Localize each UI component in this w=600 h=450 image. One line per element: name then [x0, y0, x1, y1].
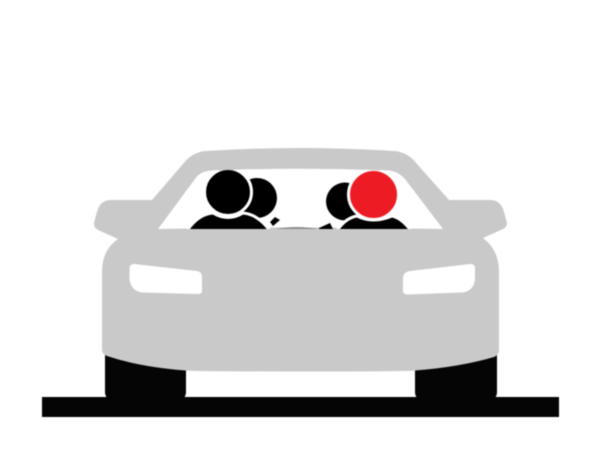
driver head — [204, 168, 252, 216]
driver body — [186, 213, 271, 232]
illustration: front view of car with occupants — [41, 148, 560, 418]
occupants — [186, 168, 412, 232]
front passenger head in red — [348, 170, 398, 220]
ground bar — [42, 397, 559, 417]
icon: left wheel — [105, 340, 186, 399]
hood edge — [275, 227, 318, 229]
rear left passenger — [237, 178, 277, 218]
right seat belt fragment — [319, 223, 333, 229]
car body — [94, 148, 507, 372]
left headlight — [130, 264, 202, 294]
front passenger body — [336, 216, 412, 232]
left seat belt fragment — [270, 217, 280, 226]
icon: right wheel — [415, 340, 497, 399]
right headlight — [403, 264, 475, 294]
windshield — [158, 169, 443, 229]
rear right passenger — [325, 182, 357, 222]
